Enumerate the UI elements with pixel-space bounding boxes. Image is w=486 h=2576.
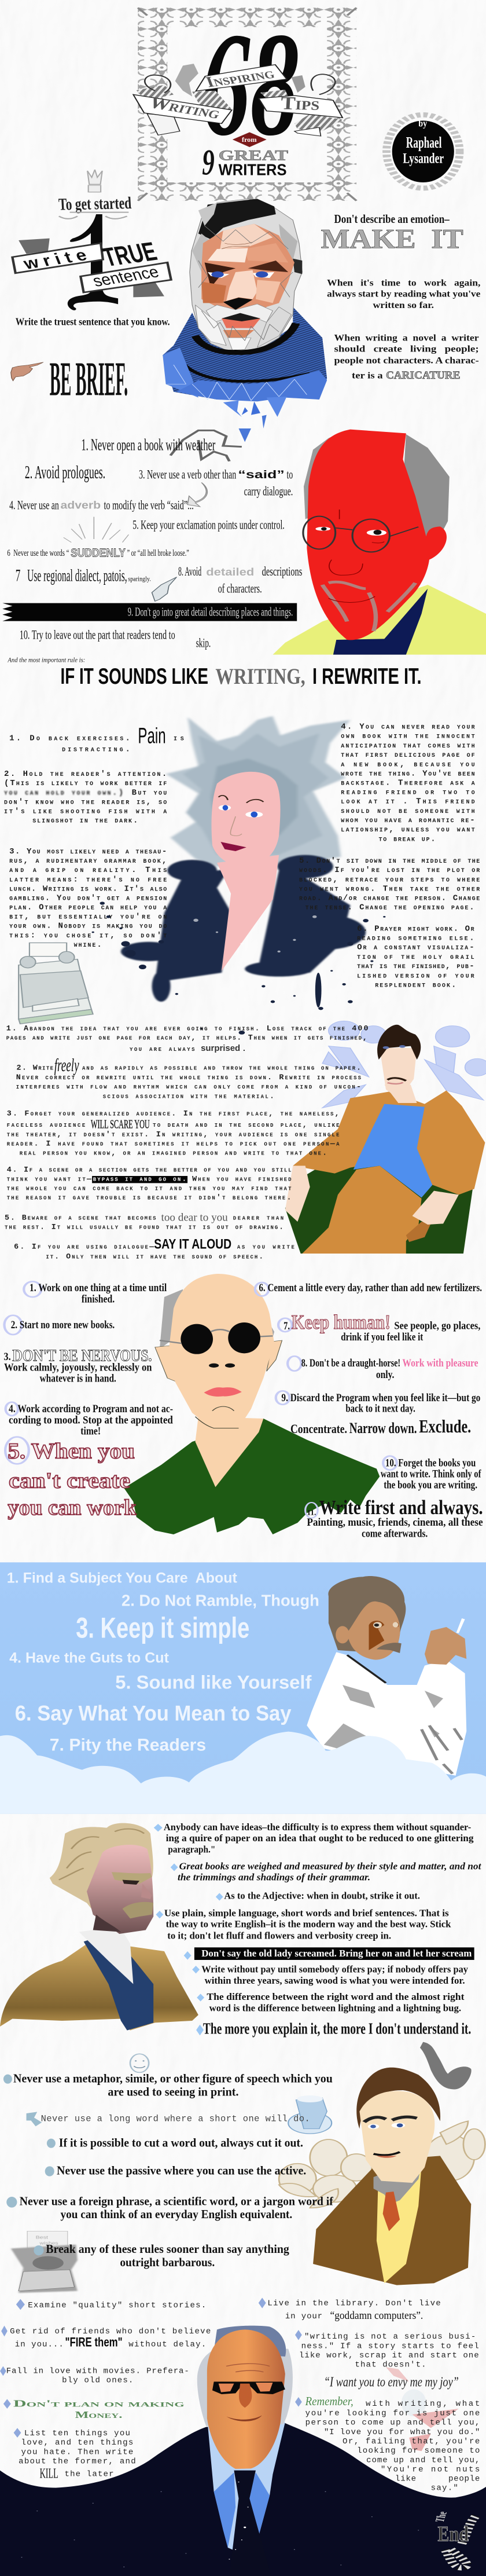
Miller 1 <box>30 1282 167 1305</box>
tip: remember: person to come up and tell you, <box>305 2419 480 2428</box>
Miller 1: 1. Work on one thing at a time until <box>30 1282 167 1294</box>
rule 8 <box>178 564 302 596</box>
tip: remember <box>305 2399 480 2493</box>
icon: typewriter <box>19 943 93 1024</box>
tip 1: you are always <box>130 1045 195 1054</box>
tip 6: reading something else. <box>357 934 474 943</box>
tip 6: 6. Prayer might work. Or <box>357 924 474 933</box>
Vonnegut tips 1-5: 4. Have the Guts to Cut <box>9 1650 169 1666</box>
tip 2: (This is likely to work better if <box>4 779 167 788</box>
tip: list ten things <box>19 2429 136 2479</box>
rule 4: adverb <box>60 499 101 511</box>
tip 1 <box>9 734 184 754</box>
decoration: tan flowers <box>279 2121 485 2208</box>
tip 4: anticipation that comes with <box>341 741 475 750</box>
dark suit silhouette <box>0 2423 486 2576</box>
Bradbury tip bullets and emphasis <box>0 2297 459 2481</box>
tip: not serious business: that doesn't. <box>355 2361 426 2370</box>
tip: love movies: Fall in love with movies. Prefera- <box>6 2366 189 2376</box>
tip: living people <box>334 334 479 381</box>
badge: from <box>233 132 267 147</box>
Miller 4: 4. Work according to Program and not ac- <box>9 1403 173 1415</box>
tip: love movies <box>6 2366 189 2385</box>
banner: write: w r i t e <box>20 246 89 273</box>
icon: smiley <box>130 2054 149 2072</box>
Orwell rule 1: are used to seeing in print. <box>108 2085 239 2098</box>
tip: examine stories: Examine "quality" short stories. <box>28 2301 206 2310</box>
Miller 3 <box>3 1347 152 1384</box>
note: most important rule: And the most important rule is: <box>8 657 85 664</box>
bullet diamonds <box>0 2297 302 2438</box>
ribbon tails <box>19 239 164 297</box>
tip 5 <box>5 1214 284 1232</box>
Bradbury tips text <box>6 2299 480 2493</box>
tip 6: lished version of your <box>357 971 474 980</box>
Orwell rule 4 <box>45 2164 306 2177</box>
tip 2: scious association with the material. <box>103 1092 274 1101</box>
tip: remember: with writing, what <box>366 2399 480 2409</box>
tip 2: and as rapidly as possible and throw the whole thing on paper. <box>82 1064 361 1073</box>
portrait: Steinbeck <box>285 1025 485 1254</box>
tip 3: 3. You most likely need a thesau- <box>9 847 167 856</box>
tip: live in library <box>267 2299 441 2321</box>
title block <box>133 2 459 201</box>
tip 6 <box>357 924 474 990</box>
tip 3: whine. <box>74 940 102 950</box>
tip: truest sentence: Write the truest sentence that you know. <box>16 316 170 328</box>
tip 3: bit, but essentially you're on <box>9 913 167 922</box>
portrait: Orwell <box>313 2068 471 2285</box>
tip: not serious business <box>299 2332 479 2370</box>
emphasised words: too dear to you <box>161 1211 228 1223</box>
section: Henry Miller commandments <box>3 1274 483 1540</box>
Miller 3: Work calmly, joyously, recklessly on <box>4 1362 152 1373</box>
Twain tip: plain language <box>156 1907 451 1941</box>
tip 5: dearer than <box>233 1214 284 1223</box>
Orwell rule 2 <box>27 2112 310 2126</box>
tip: get rid of friends: Get rid of friends who don't believe <box>10 2327 211 2336</box>
Miller 5: can't create <box>9 1468 130 1493</box>
icon: pipe <box>420 2042 472 2089</box>
tip 5 <box>299 856 480 913</box>
section: Atwood tips <box>4 657 480 1035</box>
tip 2 <box>4 769 167 826</box>
tip: remember: like people <box>395 2474 480 2483</box>
tip: love movies: bly old ones. <box>62 2376 133 2385</box>
tip 2: 2. Hold the reader's attention. <box>4 769 167 779</box>
9 great writers: WRITERS <box>219 161 287 179</box>
rule 9 black bar <box>2 603 297 621</box>
rule 4: 4. Never use an <box>9 497 59 512</box>
Twain tip: without pay <box>192 1964 468 1986</box>
Miller 9: back to it next day. <box>345 1403 415 1415</box>
tip 4: own book with the innocent <box>341 732 475 741</box>
rule 8: detailed <box>206 566 254 578</box>
emphasised words: freely <box>54 1055 79 1075</box>
section: Steinbeck tips <box>5 1021 486 1261</box>
tip: remember: you're looking for is just one <box>305 2409 480 2419</box>
tip 5: blocked, retrace your steps to where <box>299 875 480 884</box>
tip 4: look at it . This friend <box>341 797 475 807</box>
Miller 3: whatever is in hand. <box>40 1373 116 1384</box>
tip 1: . <box>242 1045 246 1054</box>
Bradbury tip bullets and emphasis: "FIRE them" <box>65 2335 123 2350</box>
tip: don't plan on money <box>13 2398 185 2420</box>
Miller 11: 11. <box>307 1508 316 1517</box>
Miller 3: 3. <box>3 1351 11 1362</box>
tip 4: lationship, unless you want <box>341 825 475 834</box>
Orwell rule 3 <box>47 2136 303 2149</box>
Orwell rule 1 <box>3 2072 333 2098</box>
Vonnegut tips 6-7 and coat stripes: 7. Pity the Readers <box>50 1735 206 1754</box>
tip: remember: come up and tell you, <box>366 2456 480 2465</box>
tip 4: wrote the thing. You've been <box>341 769 475 778</box>
Miller 5 <box>8 1439 137 1520</box>
section: Elmore Leonard rules: ” or “all hell broke loose.” <box>127 548 189 558</box>
icon: lightning cloud <box>171 430 242 461</box>
icon: gray typewriter: Best <box>36 2236 48 2240</box>
decoration: burst rays <box>64 517 128 543</box>
clouds <box>0 1732 486 1814</box>
tip: living people: ter is a <box>352 371 383 380</box>
section: Elmore Leonard rules: 1. Never open a book with weather <box>81 436 216 454</box>
Miller 10 <box>381 1457 481 1491</box>
Miller 8 <box>301 1357 478 1380</box>
tip 1 <box>6 1024 368 1054</box>
Twain tip: great books <box>171 1860 482 1883</box>
tip 3: faceless audience <box>7 1121 86 1130</box>
tip: remember: Or, failing that, you're <box>343 2437 480 2446</box>
tip 6: resplendent book. <box>375 980 456 990</box>
tip 4: bypass it and go on. <box>93 1175 186 1183</box>
9 great writers <box>202 142 289 183</box>
Miller 1: finished. <box>82 1294 115 1305</box>
word: true: TRUE <box>99 236 160 272</box>
ornamental frame <box>138 8 356 201</box>
Miller 9 <box>281 1392 480 1437</box>
tip 2: you can hold your own.) <box>4 788 123 797</box>
icon: the end zebra <box>432 2511 477 2567</box>
portrait: Vonnegut <box>307 1576 466 1776</box>
tip: not serious business: "writing is not a serious busi- <box>304 2332 476 2342</box>
Miller 9: Concentrate. <box>290 1421 347 1436</box>
tip 3 <box>7 1110 340 1158</box>
tip 2: 2. Write <box>16 1064 54 1073</box>
rule 7 <box>16 565 151 585</box>
tip 3: rus, a rudimentary grammar book, <box>9 856 167 866</box>
tip: remember: "I love you for what you do." <box>324 2428 480 2437</box>
banner: sentence <box>80 262 171 292</box>
Twain tip: great books: the trimmings and shadings of their grammar. <box>178 1872 370 1883</box>
tip 6: that is the finished, pub- <box>357 962 474 971</box>
tip 6: as you write <box>237 1243 295 1252</box>
Miller 11 <box>305 1496 483 1540</box>
Vonnegut tips 1-5: 2. Do Not Ramble, Though <box>122 1591 319 1609</box>
emphasised words: WILL SCARE YOU <box>91 1117 150 1131</box>
section: Hemingway tips: BE BRIEF. <box>50 353 128 406</box>
tip 5: road. And/or change the person. Change <box>299 893 480 903</box>
decoration: number swirls <box>5 1281 397 1470</box>
Orwell rule 6: outright barbarous. <box>120 2255 215 2269</box>
rule 6 <box>7 546 189 559</box>
tip 3: lunch. Writing is work. It's also <box>9 884 167 893</box>
rule 7: 7 <box>16 565 20 585</box>
banner: tips <box>259 93 343 118</box>
tip 5: woods. If you're lost in the plot or <box>299 866 480 875</box>
rocket decoration <box>386 2367 459 2451</box>
Twain tip: ideas <box>154 1822 474 1855</box>
Orwell rule 5 <box>6 2194 333 2220</box>
tip 3: the theater, it doesn't exist. In writing, your audience is one single <box>7 1130 340 1139</box>
Orwell rule 3: If it is possible to cut a word out, always cut it out. <box>59 2136 303 2149</box>
icon: the end zebra: The <box>432 2511 450 2523</box>
tip: remember: "You're not nuts <box>381 2465 480 2474</box>
tip 4: to break up. <box>379 834 436 844</box>
tip: live in library: in your <box>285 2312 322 2321</box>
section: Twain tips <box>0 1822 482 2072</box>
Vonnegut tips 1-5 <box>7 1570 319 1693</box>
tip: list ten things: about the former, and <box>19 2457 136 2466</box>
icon: pointing hand <box>152 577 176 601</box>
portrait: Twain <box>0 1823 198 2031</box>
tip: don't plan on money: Money. <box>75 2409 123 2420</box>
Steinbeck tips text <box>5 1024 368 1261</box>
portrait: Miller <box>124 1274 380 1534</box>
tip: reread <box>327 279 480 310</box>
section: Elmore Leonard rules: 10. Try to leave out the part that readers tend to <box>20 627 175 642</box>
icon: gray typewriter <box>11 2231 78 2293</box>
Twain tip: ideas: paragraph." <box>168 1844 215 1855</box>
tip 5: 5. Don't sit down in the middle of the <box>299 856 480 866</box>
Miller 2: 2. Start no more new books. <box>11 1319 115 1331</box>
tip 4 <box>7 1166 292 1203</box>
tip: remember: say." <box>431 2484 458 2493</box>
icon: pointing hand <box>11 362 43 381</box>
tip 3: and a grip on reality. This <box>9 866 167 875</box>
Vonnegut tips 1-5: 1. Find a Subject You Care About <box>7 1570 237 1586</box>
Orwell rule 6: Break any of these rules sooner than say anything <box>46 2242 289 2255</box>
section: Elmore Leonard rules <box>2 430 486 655</box>
tip 4: reading friend or two to <box>341 788 475 797</box>
Miller 3: DON'T BE NERVOUS. <box>12 1347 152 1365</box>
tip 4: the whole you can come back to it and then you may find that <box>7 1185 292 1193</box>
emphasis: remember: Remember, <box>305 2394 354 2408</box>
tip: not serious business: ness." If a story starts to feel <box>301 2342 479 2351</box>
section: Elmore Leonard rules: descriptions <box>262 564 302 578</box>
Miller 7: Keep human! <box>292 1311 391 1333</box>
9 great writers: GREAT <box>219 148 289 164</box>
9 great writers: 9 <box>202 142 215 183</box>
big numeral 1 with flourishes <box>59 212 128 310</box>
blue sky panel <box>0 1562 486 1814</box>
tip 3: your own. Nobody is making you do <box>9 922 167 931</box>
tip: get rid of friends: without delay. <box>128 2340 206 2350</box>
Miller 8: only. <box>376 1369 394 1380</box>
emphasised words <box>54 1043 240 1252</box>
Miller 4 <box>9 1403 173 1437</box>
portrait: Hemingway <box>163 199 327 442</box>
Atwood tips 1 to 3 <box>4 722 480 990</box>
tip 3: reader. I have found that sometimes it helps to pick out one person—a <box>7 1139 340 1148</box>
section: Elmore Leonard rules: carry dialogue. <box>244 483 293 499</box>
tip 5: you went wrong. Then take the other <box>299 884 480 893</box>
tip 6: tion of the holy grail <box>357 952 474 962</box>
portrait: Leonard <box>273 430 486 655</box>
badge: from: from <box>242 136 257 144</box>
tip 5: the rest. It will usually be found that it is out of drawing. <box>5 1223 284 1232</box>
section: Elmore Leonard rules: 2. Avoid prologues. <box>25 462 105 482</box>
tip 2: But you <box>132 788 167 797</box>
tip 1: 1. Do back exercises. <box>9 734 130 743</box>
rule 3: “said” <box>238 469 285 481</box>
section: Elmore Leonard rules: to <box>287 467 293 482</box>
Orwell rule 5: you can think of an everyday English equivalent. <box>60 2207 292 2220</box>
author badge: by <box>418 118 427 129</box>
tip 6: Or a constant visualiza- <box>357 943 474 952</box>
section: Bradbury tips <box>0 2326 486 2576</box>
section: Elmore Leonard rules: to modify the verb “said”... <box>104 497 194 512</box>
tip 6: it. Only then will it have the sound of speech. <box>46 1252 263 1261</box>
tip 2: Never correct or rewrite until the whole thing is down. Rewrite in process <box>16 1073 362 1082</box>
Miller 4: time! <box>80 1426 101 1437</box>
rule 3: 3. Never use a verb other than <box>139 467 236 482</box>
tip 6: 6. If you are using dialogue— <box>14 1243 154 1252</box>
tip: list ten things: the later <box>64 2470 114 2479</box>
tip: reread: written so far. <box>373 301 434 310</box>
banner: writing: Writing <box>146 94 223 123</box>
tip 4: the reason it gave trouble is because it didn't belong there. <box>7 1194 292 1203</box>
tip 3: latter means: there's no free <box>9 875 167 884</box>
heading: if it sounds like writing: WRITING, <box>215 664 305 689</box>
rule 8: 8. Avoid <box>178 564 201 578</box>
Vonnegut tips 6-7 and coat stripes: 6. Say What You Mean to Say <box>15 1702 292 1725</box>
tip 4: 4. You can never read your <box>341 722 475 731</box>
tip: don't plan on money: Don't plan on making <box>13 2398 185 2409</box>
banner: inspiring: Inspiring <box>204 64 277 90</box>
Orwell rule 4: Never use the passive where you can use the active. <box>57 2164 306 2177</box>
icon: curved arrow <box>187 482 207 507</box>
tip 4: whom you have a romantic re- <box>341 816 475 825</box>
Vonnegut tips 1-5: 5. Sound like Yourself <box>115 1672 312 1693</box>
tip 5: the tense. Change the opening page. <box>305 903 474 913</box>
tip 3: 3. Forget your generalized audience. In the first place, the nameless, <box>7 1110 340 1119</box>
tip 2 <box>16 1064 362 1101</box>
tip 2: interferes with flow and rhythm which can only come from a kind of uncon- <box>16 1083 361 1091</box>
Orwell rule 6 <box>34 2242 289 2269</box>
tip: list ten things: you hate. Then write <box>21 2447 133 2457</box>
ribbon tails <box>137 64 343 136</box>
rule 6: 6 Never use the words “ <box>7 548 69 558</box>
tip 3: gambling. You don't get a pension <box>9 893 167 903</box>
tip 4: a new book, because you <box>341 760 475 769</box>
tip: not serious business: like work, scrap it and start one <box>299 2351 479 2361</box>
tip: live in library: Live in the library. Don't live <box>267 2299 441 2308</box>
Vonnegut tips 1-5: 3. Keep it simple <box>76 1612 249 1644</box>
tip 3 <box>9 847 167 950</box>
tip 2: don't know who the reader is, so <box>4 798 167 807</box>
tip: remember: looking for someone to <box>357 2446 480 2456</box>
tip 1: distracting. <box>62 745 130 754</box>
section: Vonnegut tips on blue <box>0 1562 486 1814</box>
banner: tips: Tips <box>280 93 320 114</box>
Twain tip: right word <box>197 1991 465 2014</box>
section: Elmore Leonard rules: skip. <box>196 635 211 650</box>
Vonnegut tips 6-7 and coat stripes <box>15 1702 465 1776</box>
tip 2: slingshot in the dark. <box>32 816 138 826</box>
stars <box>21 2491 419 2567</box>
Miller 7: 7. <box>284 1320 290 1332</box>
Miller 5: 5. When you <box>8 1439 135 1463</box>
emphasised words: SAY IT ALOUD <box>154 1236 231 1252</box>
crown icon <box>87 170 102 192</box>
tip 4: think you want it— <box>7 1175 92 1183</box>
section: Elmore Leonard rules: Use regional dialect, patois, <box>27 565 127 585</box>
rule 3 <box>139 467 293 499</box>
tip 4: backstage. Therefore ask a <box>341 778 475 787</box>
icon: gray typewriter: wishes <box>39 2241 58 2246</box>
tip 3: plan. Other people can help you a <box>9 903 167 913</box>
Bradbury tip bullets and emphasis: KILL <box>40 2465 58 2481</box>
tip 3: to death and in the second place, unlike <box>153 1121 340 1130</box>
tip 6 <box>14 1243 295 1261</box>
tip: list ten things: List ten things you <box>24 2429 130 2438</box>
rule 8: of characters. <box>218 581 262 596</box>
tip 4 <box>341 722 475 844</box>
tip 4: that first delicious page of <box>341 750 475 760</box>
tip 4: 4. If a scene or a section gets the better of you and you still <box>7 1166 292 1174</box>
portrait: Bradbury <box>197 2326 293 2576</box>
tip 1: is <box>174 734 184 743</box>
title block: 68 <box>201 2 299 167</box>
decoration: blue flowers <box>322 1021 486 1108</box>
tip 4: When you have finished <box>192 1175 292 1183</box>
emphasised words: surprised <box>201 1043 240 1053</box>
Miller 4: cording to mood. Stop at the appointed <box>9 1415 173 1426</box>
Miller 5: you can work <box>8 1495 137 1520</box>
section: Orwell rules <box>3 2042 485 2293</box>
tip 3: real person you know, or an imagined person and write to that one. <box>20 1149 327 1158</box>
tip 5: 5. Beware of a scene that becomes <box>5 1214 156 1223</box>
author badge <box>386 115 459 188</box>
section: Hemingway tips: To get started <box>58 194 132 214</box>
section: Atwood tips: Pain <box>138 723 166 748</box>
rule 7: sparingly. <box>128 576 151 582</box>
tip: get rid of friends: in you... <box>15 2340 64 2350</box>
tip: list ten things: love, and ten things <box>21 2438 133 2447</box>
portrait: Atwood <box>92 716 385 1035</box>
tip: get rid of friends <box>10 2327 211 2350</box>
Orwell rule 2: Never use a long word where a short one will do. <box>41 2113 310 2124</box>
icon: teacup <box>288 2095 332 2134</box>
tip 1: pages and write just one page for each day, it helps. Then when it gets finished, <box>6 1034 367 1043</box>
tip 2: it's like shooting fish with a <box>4 807 167 816</box>
banner: sentence: sentence <box>90 263 161 290</box>
heading: if it sounds like writing: IF IT SOUNDS LIKE <box>60 664 208 688</box>
rule 6: SUDDENLY <box>71 546 126 559</box>
Miller 7 <box>284 1311 480 1343</box>
tip 4: should not be someone with <box>341 807 475 816</box>
tip 1: 1. Abandon the idea that you are ever going to finish. Lose track of the 400 <box>6 1024 368 1033</box>
section: Hemingway tips <box>11 170 480 442</box>
tip 3: this: you chose it, so don't <box>9 931 167 940</box>
Miller 11: come afterwards. <box>362 1528 428 1540</box>
